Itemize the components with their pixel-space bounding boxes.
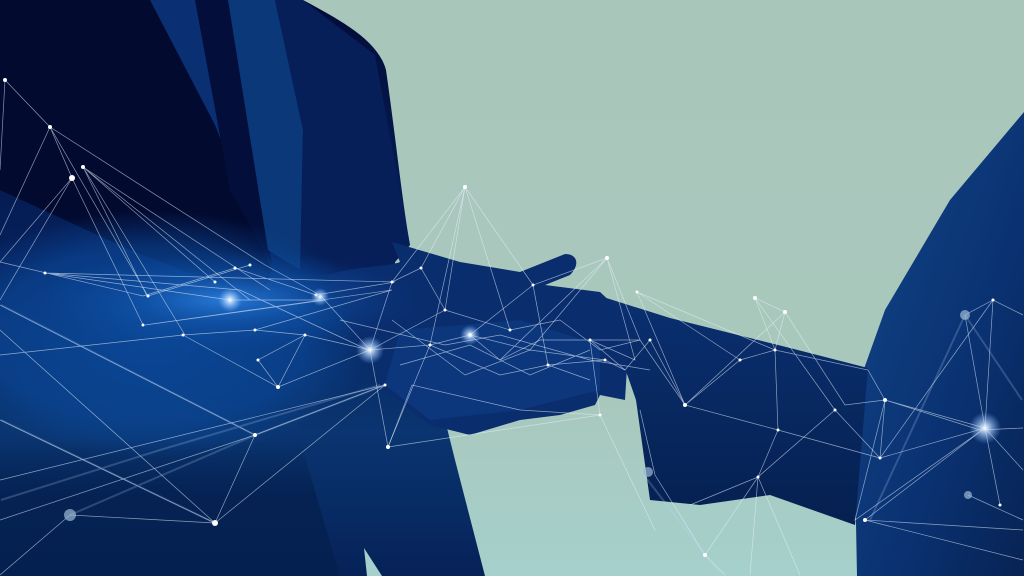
right figure: suit body xyxy=(855,112,1024,576)
right figure: sleeve and cuff xyxy=(600,296,868,525)
network: faint wide beams xyxy=(1,305,1022,574)
left figure: suit xyxy=(0,0,485,576)
left figure: lower body shading xyxy=(0,210,375,576)
blue glow along arm xyxy=(35,250,415,350)
clasped hands xyxy=(328,242,630,435)
network: bright star nodes xyxy=(218,288,1001,444)
network: soft blurred nodes xyxy=(64,310,972,521)
